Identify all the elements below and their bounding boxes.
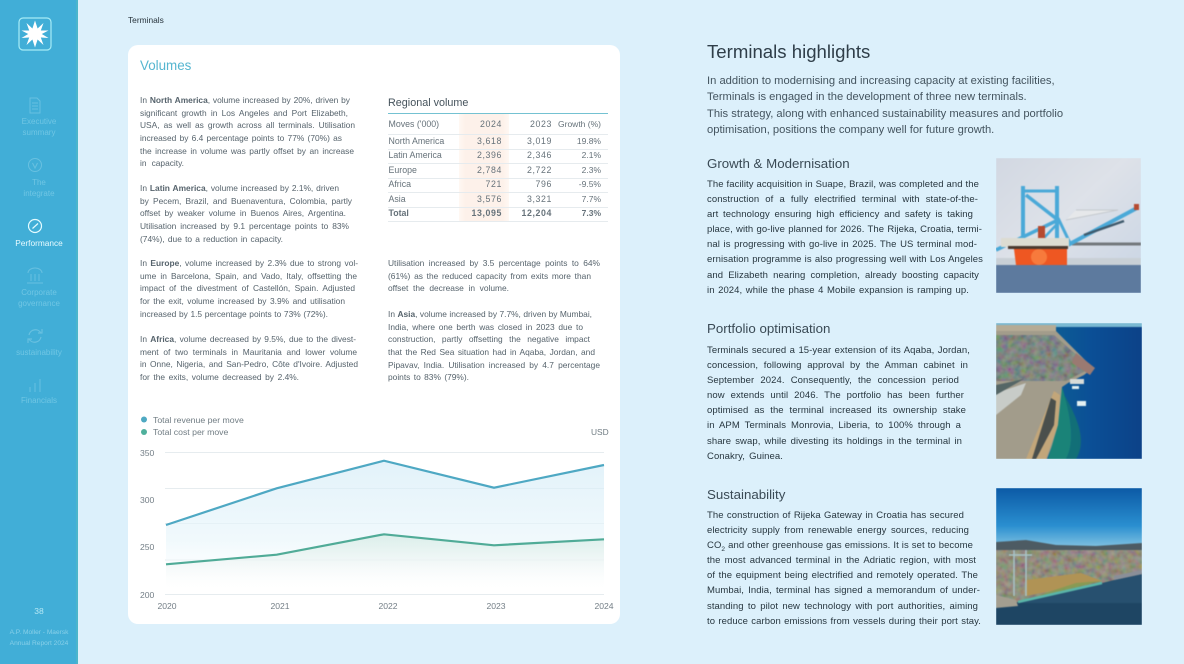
text: growth [707, 179, 983, 296]
icon: the integrator [28, 158, 42, 172]
panel: volumes [128, 45, 620, 624]
intro text: This strategy, along with enhanced sustainability measures and portfolio [707, 108, 1063, 120]
2024 values: 2024 [480, 118, 502, 128]
text: growth: and Elizabeth nearing completion, already boosting capacity [707, 270, 979, 281]
text: sustainability: to reduce carbon emissions from vessels during their port stay. [707, 616, 981, 627]
2024 values: 2,784 [477, 165, 502, 175]
text: north america [140, 95, 355, 168]
y axis: 350 [140, 448, 155, 458]
2024 values: 3,576 [477, 194, 502, 204]
2023 values: 796 [536, 179, 552, 189]
heading: volumes: Volumes [140, 58, 191, 73]
text: africa: for the exits, volume decreased by 2.4%. [140, 372, 299, 382]
text: europe: for the exit, volume increased by 3.9% and utilisation [140, 296, 345, 306]
2023 values: 3,019 [527, 136, 552, 146]
line chart [140, 415, 614, 611]
table labels: North America [388, 136, 444, 146]
nav: the integrator: integrate [23, 188, 55, 198]
text: portfolio: optimised as the terminal increased its ownership stake [707, 405, 966, 416]
text: latin america: Utilisation increased by 9.1 percentage points to 83% [140, 221, 349, 231]
nav: corporate governance: Corporate [21, 288, 57, 297]
image: rijeka gateway [996, 488, 1142, 625]
x axis: 2022 [378, 601, 398, 611]
report name: Annual Report 2024 [10, 640, 68, 646]
y axis: 200 [140, 590, 155, 600]
text: latin america: (74%), due to a reduction in capacity. [140, 234, 283, 244]
nav: corporate governance [18, 288, 60, 308]
text: europe: impact of the divestment of Castellón, Spain. Adjusted [140, 283, 355, 293]
growth values: 2.1% [582, 150, 601, 160]
icon: financials [30, 379, 40, 392]
nav: executive summary [22, 117, 56, 136]
2023 values [521, 118, 552, 218]
text: sustainability: CO2 and other greenhouse gas emissions. It is set to become [707, 540, 973, 553]
x axis: 2021 [270, 601, 290, 611]
text: africa: In Africa, volume decreased by 9.5%, due to the divest- [140, 334, 356, 344]
text: asia: construction, partly offsetting the negative impact [388, 334, 590, 344]
y axis: 300 [140, 495, 155, 505]
report name: A.P. Moller - Maersk [10, 629, 68, 636]
growth values: 19.8% [577, 136, 601, 146]
heading: terminals highlights: Terminals highlights [707, 41, 870, 62]
heading: growth: Growth & Modernisation [707, 156, 850, 171]
sidebar [0, 0, 78, 664]
table title: Regional volume [388, 97, 468, 109]
text: north america: significant growth in Los Angeles and Port Elizabeth, [140, 108, 348, 118]
text: north america: the increase in volume was partly offset by an increase [140, 146, 354, 156]
growth values: 7.3% [582, 208, 601, 218]
text: growth: art technology ensuring high efficiency and safety is taking [707, 209, 973, 220]
text: sustainability: the most advanced terminal in the Adriatic region, with most [707, 555, 976, 566]
x axis: 2023 [486, 601, 506, 611]
text: africa continued: Utilisation increased by 3.5 percentage points to 64% [388, 258, 600, 268]
table labels: Latin America [388, 150, 442, 160]
text: latin america: In Latin America, volume increased by 2.1%, driven [140, 183, 339, 193]
x axis: 2020 [157, 601, 177, 611]
growth values: 2.3% [582, 165, 601, 175]
text: africa continued: (61%) as the reduced capacity from exits more than [388, 271, 591, 281]
icon: performance [28, 218, 42, 234]
heading: portfolio: Portfolio optimisation [707, 321, 830, 336]
2023 values: 3,321 [527, 194, 552, 204]
icon: corporate governance [27, 268, 43, 284]
growth values: Growth (%) [558, 118, 601, 128]
text: europe [140, 258, 358, 319]
nav: the integrator [23, 178, 55, 198]
text: asia: points to 83% (79%). [388, 372, 469, 382]
table labels: Total [388, 208, 409, 218]
text: europe: increased by 1.5 percentage points to 73% (72%). [140, 309, 328, 319]
text: asia: In Asia, volume increased by 7.7%, driven by Mumbai, [388, 309, 592, 319]
table labels: Europe [388, 165, 417, 175]
text: portfolio: September 2024. Consequently, the concession period [707, 375, 959, 386]
page number: 38 [34, 606, 44, 616]
text: north america: in capacity. [140, 158, 184, 168]
image: crane on ship [996, 158, 1141, 293]
legend: Total revenue per move [153, 415, 244, 425]
2023 values: 2,346 [527, 150, 552, 160]
text: sustainability: standing to pilot new technology with port authorities, aiming [707, 601, 978, 612]
text: growth: nal is progressing with go-live in 2025. The US terminal mod- [707, 239, 977, 250]
text: latin america [140, 183, 352, 244]
cost area [166, 534, 604, 590]
text: asia: that the Red Sea situation had in Aqaba, Jordan, and [388, 347, 595, 357]
nav: executive summary: summary [23, 128, 55, 136]
highlighted 2024 column [459, 114, 509, 221]
nav: executive summary: Executive [22, 117, 56, 126]
revenue line [166, 461, 604, 525]
2024 values [471, 118, 502, 218]
legend [141, 415, 244, 437]
text: portfolio: Terminals secured a 15-year extension of its Aqaba, Jordan, [707, 345, 970, 356]
text: growth: The facility acquisition in Suape, Brazil, was completed and the [707, 179, 979, 190]
text: africa continued [388, 258, 600, 293]
table: regional volume [388, 97, 608, 222]
text: sustainability: Mumbai, India, terminal has signed a memorandum of under- [707, 585, 980, 596]
text: growth: construction of a fully electrified terminal with state-of-the- [707, 194, 978, 205]
text: growth: in 2024, while the phase 4 Mobile expansion is ramping up. [707, 285, 969, 296]
intro text: optimisation, positions the company well for future growth. [707, 124, 994, 136]
2024 values: 13,095 [471, 208, 502, 218]
2023 values: 12,204 [521, 208, 552, 218]
report name [10, 629, 68, 646]
icon: sustainability [28, 329, 42, 343]
text: portfolio [707, 345, 970, 462]
text: growth: ernisation programme is also progressing well with Los Angeles [707, 254, 983, 265]
x axis: 2024 [594, 601, 614, 611]
growth values [558, 118, 601, 218]
text: portfolio: now extends until 2046. The portfolio has been further [707, 390, 964, 401]
image: aerial port [996, 323, 1142, 459]
y axis: 250 [140, 542, 155, 552]
text: africa continued: offset the decrease in volume. [388, 283, 509, 293]
table labels [388, 118, 444, 218]
text: asia [388, 309, 600, 382]
text: sustainability: The construction of Rijeka Gateway in Croatia has secured [707, 510, 964, 521]
nav: sustainability: sustainability [16, 348, 62, 357]
growth values: 7.7% [582, 194, 601, 204]
gridlines [165, 452, 604, 594]
text: europe: In Europe, volume increased by 2.3% due to strong vol- [140, 258, 358, 268]
legend: Total cost per move [153, 427, 228, 437]
text: africa [140, 334, 358, 382]
nav: corporate governance: governance [18, 298, 60, 308]
table labels: Asia [388, 194, 406, 204]
text: latin america: by Pecem, Brazil, and Buenaventura, Colombia, partly [140, 196, 352, 206]
nav: the integrator: The [32, 178, 46, 187]
text: portfolio: concession, following approval by the Amman cabinet in [707, 360, 968, 371]
intro text: In addition to modernising and increasing capacity at existing facilities, [707, 75, 1055, 87]
2024 values: 721 [486, 179, 502, 189]
breadcrumb: Terminals [128, 15, 164, 25]
cost line [166, 534, 604, 564]
text: portfolio: Conakry, Guinea. [707, 451, 783, 462]
2023 values: 2023 [530, 118, 552, 128]
text: europe: ume in Barcelona, Spain, and Vado, Italy, offsetting the [140, 271, 357, 281]
unit label: USD [591, 427, 609, 437]
text: sustainability [707, 510, 981, 627]
heading: sustainability: Sustainability [707, 487, 785, 502]
text: north america: increased by 6.4 percentage points to 77% (70%) as [140, 133, 342, 143]
text: sustainability: of the equipment being electrified and remotely operated. The [707, 570, 978, 581]
x axis [157, 601, 614, 611]
text: sustainability: electricity supply from renewable energy sources, reducing [707, 525, 969, 536]
nav: performance: Performance [15, 238, 63, 248]
text: portfolio: share swap, while divesting its holdings in the terminal in [707, 436, 962, 447]
icon: executive summary [30, 98, 40, 114]
2023 values: 2,722 [527, 165, 552, 175]
intro text [707, 75, 1063, 136]
text: growth: place, with go-live planned for 2026. The Rijeka, Croatia, termi- [707, 224, 982, 235]
revenue area [166, 461, 604, 595]
nav: financials: Financials [21, 396, 57, 405]
2024 values: 2,396 [477, 150, 502, 160]
text: asia: Pipavav, India. Utilisation increased by 4.7 percentage [388, 360, 600, 370]
table labels: Moves ('000) [388, 118, 439, 128]
text: portfolio: in APM Terminals Monrovia, Liberia, to 100% through a [707, 420, 961, 431]
text: north america: USA, as well as growth across all terminals. Utilisation [140, 120, 355, 130]
text: asia: India, where one berth was closed in 2023 due to [388, 322, 583, 332]
logo [18, 17, 52, 51]
text: africa: ment of two terminals in Mauritania and lower volume [140, 347, 357, 357]
2024 values: 3,618 [477, 136, 502, 146]
growth values: -9.5% [579, 179, 601, 189]
text: latin america: offset by weaker volume in Buenos Aires, Argentina. [140, 208, 346, 218]
table labels: Africa [388, 179, 411, 189]
y axis [140, 448, 155, 600]
text: north america: In North America, volume increased by 20%, driven by [140, 95, 350, 105]
intro text: Terminals is engaged in the development of three new terminals. [707, 91, 1027, 103]
text: africa: in Onne, Nigeria, and San-Pedro, Côte d'Ivoire. Adjusted [140, 359, 358, 369]
